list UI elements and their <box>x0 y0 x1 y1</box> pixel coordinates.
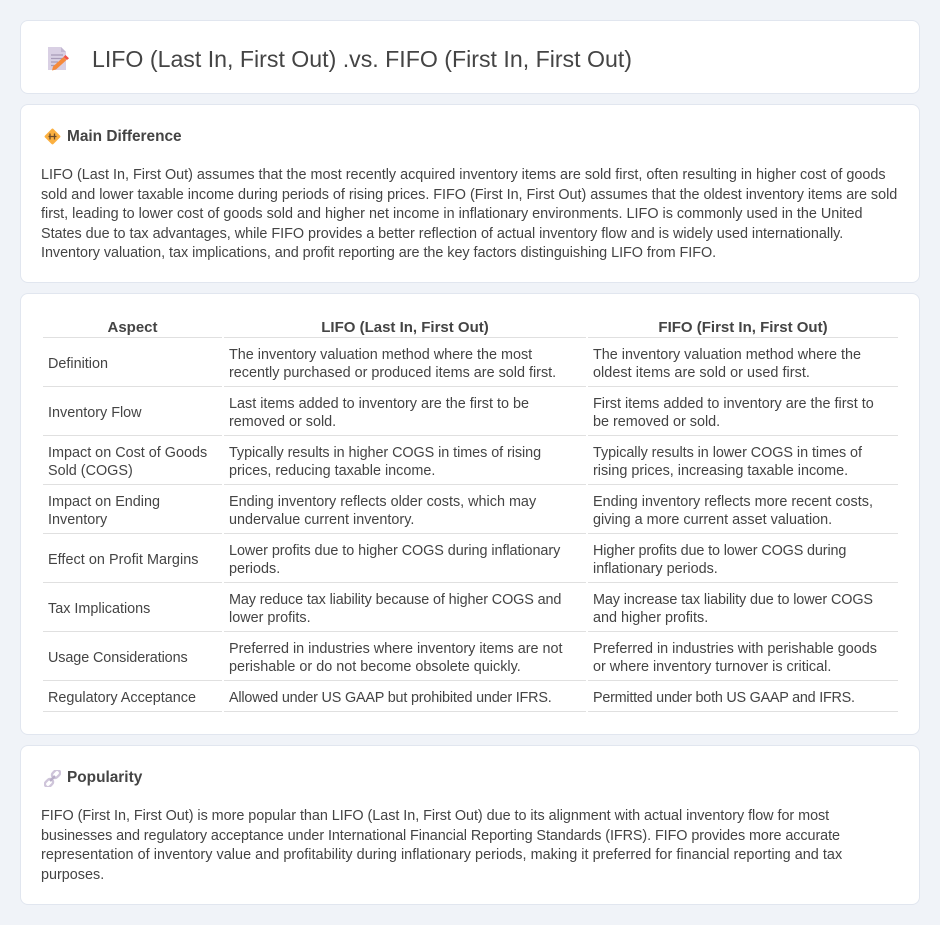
text block: main difference paragraph: first, leading to lower cost of goods sold and higher net income in inflationary environments. LIFO is commonly used in the United <box>41 206 862 222</box>
row: effect on profit margins: periods. <box>229 561 280 577</box>
row: regulatory acceptance: Permitted under both US GAAP and IFRS. <box>593 690 855 706</box>
text block: main difference paragraph: States due to tax advantages, while FIFO provides a better reflection of actual inventory flow and is widely used internationally. <box>41 226 843 242</box>
row: definition: oldest items are sold or used first. <box>593 365 810 381</box>
panel: title header <box>20 20 920 94</box>
text block: main difference paragraph: Inventory valuation, tax implications, and profit reporting are the key factors distinguishing LIFO from FIFO. <box>41 245 716 261</box>
row: impact on ending inventory: Inventory <box>48 512 107 528</box>
row: usage considerations <box>43 641 898 681</box>
icon: document with pencil <box>48 47 69 70</box>
heading: main difference: Main Difference <box>67 128 182 145</box>
row: inventory flow: Inventory Flow <box>48 405 142 421</box>
row: effect on profit margins: inflationary periods. <box>593 561 718 577</box>
text block: popularity paragraph <box>41 808 842 882</box>
panel: popularity <box>20 745 920 905</box>
row: effect on profit margins: Effect on Profit Margins <box>48 552 199 568</box>
icon: orange diamond sign <box>44 128 60 144</box>
row: inventory flow: Last items added to inventory are the first to be <box>229 396 529 412</box>
text block: popularity paragraph: purposes. <box>41 866 104 882</box>
row: impact on COGS: Impact on Cost of Goods <box>48 445 207 461</box>
row: definition: The inventory valuation method where the most <box>229 347 532 363</box>
row: impact on COGS: Sold (COGS) <box>48 463 133 479</box>
row: impact on ending inventory: undervalue current inventory. <box>229 512 414 528</box>
row: regulatory acceptance <box>43 690 898 712</box>
row: tax implications <box>43 592 898 632</box>
row: usage considerations: or where inventory turnover is critical. <box>593 659 831 675</box>
title: LIFO (Last In, First Out) .vs. FIFO (First In, First Out) <box>92 46 632 72</box>
row: impact on ending inventory: Ending inventory reflects more recent costs, <box>593 494 873 510</box>
row: impact on ending inventory <box>43 494 898 534</box>
row: impact on COGS: prices, reducing taxable income. <box>229 463 435 479</box>
text block: main difference paragraph: LIFO (Last In, First Out) assumes that the most recently acquired inventory items are sold first, often resulting in higher cost of goods <box>41 167 886 183</box>
row: usage considerations: perishable or do not become obsolete quickly. <box>229 659 521 675</box>
heading: popularity: Popularity <box>67 769 142 786</box>
row: impact on COGS: Typically results in higher COGS in times of rising <box>229 445 541 461</box>
row: inventory flow: be removed or sold. <box>593 414 720 430</box>
row: regulatory acceptance: Allowed under US GAAP but prohibited under IFRS. <box>229 690 552 706</box>
row: tax implications: Tax Implications <box>48 601 150 617</box>
row: impact on ending inventory: giving a more current asset valuation. <box>593 512 832 528</box>
text block: popularity paragraph: FIFO (First In, First Out) is more popular than LIFO (Last In, First Out) due to its alignment with actual inventory flow for most <box>41 808 829 824</box>
row: definition: recently purchased or produced items are sold first. <box>229 365 556 381</box>
text block: popularity paragraph: representation of inventory value and profitability during inflationary periods, making it preferred for financial reporting and tax <box>41 847 842 863</box>
panel: comparison table <box>20 293 920 735</box>
table header row <box>43 319 898 338</box>
row: inventory flow: First items added to inventory are the first to <box>593 396 874 412</box>
row: inventory flow <box>43 396 898 436</box>
row: inventory flow: removed or sold. <box>229 414 336 430</box>
row: tax implications: May reduce tax liability because of higher COGS and <box>229 592 561 608</box>
row: impact on ending inventory: Impact on Ending <box>48 494 160 510</box>
table header row: LIFO (Last In, First Out) <box>321 319 489 336</box>
icon: chain link <box>44 770 61 787</box>
row: impact on COGS: rising prices, increasing taxable income. <box>593 463 848 479</box>
text block: main difference paragraph: sold and lower taxable income during periods of rising prices. FIFO (First In, First Out) assumes that the oldest inventory items are sold <box>41 186 897 202</box>
row: impact on ending inventory: Ending inventory reflects older costs, which may <box>229 494 536 510</box>
row: tax implications: May increase tax liability due to lower COGS <box>593 592 873 608</box>
row: regulatory acceptance: Regulatory Acceptance <box>48 690 196 706</box>
row: definition <box>43 347 898 387</box>
text block: popularity paragraph: businesses and regulatory acceptance under International Financial Reporting Standards (IFRS). FIFO provides more accurate <box>41 828 840 844</box>
row: usage considerations: Preferred in industries with perishable goods <box>593 641 877 657</box>
table header row: Aspect <box>107 319 158 336</box>
text block: main difference paragraph <box>41 167 897 261</box>
panel: main difference <box>20 104 920 283</box>
row: effect on profit margins: Higher profits due to lower COGS during <box>593 543 846 559</box>
row: tax implications: and higher profits. <box>593 610 708 626</box>
row: effect on profit margins <box>43 543 898 583</box>
row: definition: The inventory valuation method where the <box>593 347 861 363</box>
row: usage considerations: Preferred in industries where inventory items are not <box>229 641 563 657</box>
row: tax implications: lower profits. <box>229 610 311 626</box>
table header row: FIFO (First In, First Out) <box>658 319 828 336</box>
row: definition: Definition <box>48 356 108 372</box>
row: usage considerations: Usage Considerations <box>48 650 188 666</box>
row: effect on profit margins: Lower profits due to higher COGS during inflationary <box>229 543 560 559</box>
row: impact on COGS: Typically results in lower COGS in times of <box>593 445 862 461</box>
row: impact on COGS <box>43 445 898 485</box>
